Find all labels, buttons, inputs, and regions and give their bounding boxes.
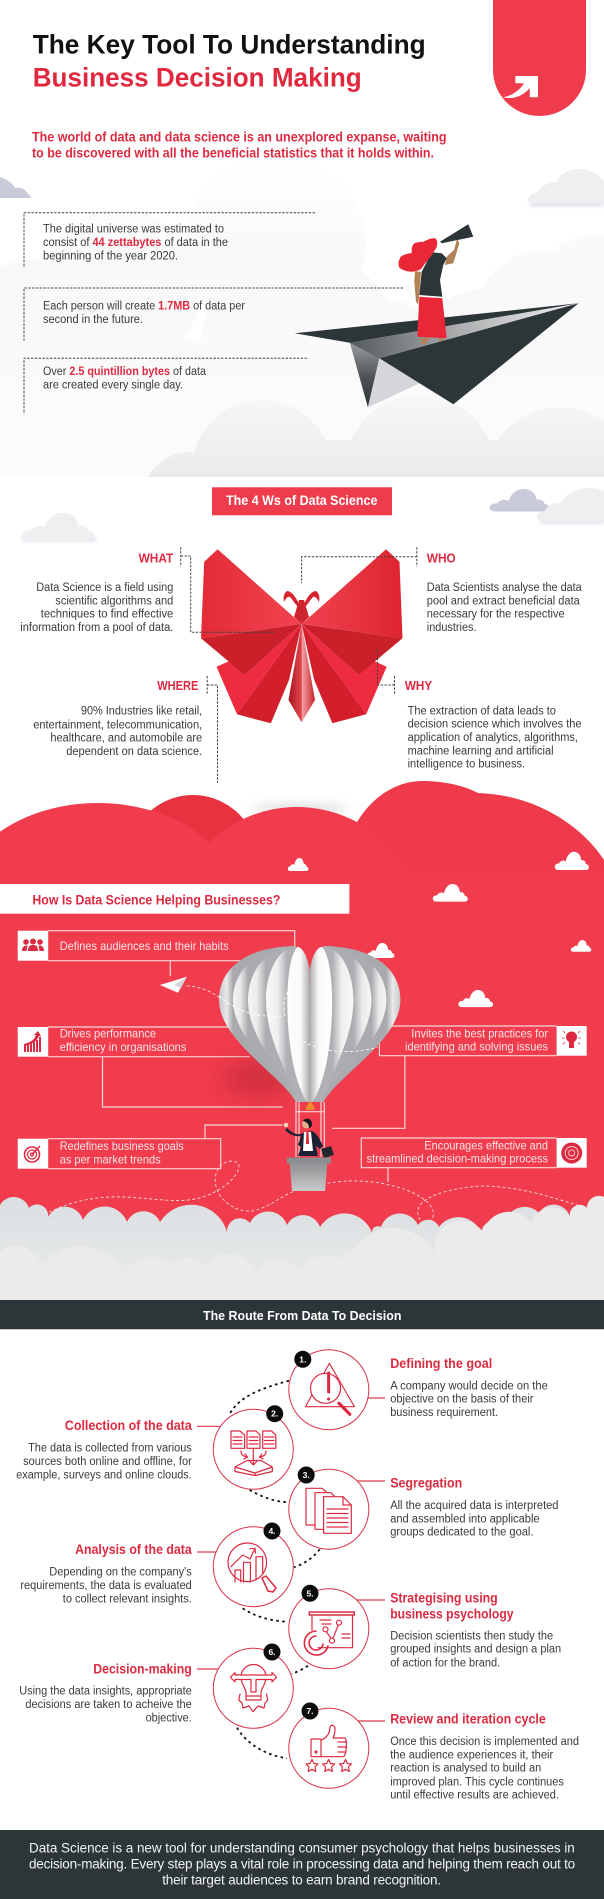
step 7: review and iteration: 7. bbox=[306, 1706, 314, 1716]
illustration: heart balloon bbox=[219, 946, 400, 1102]
icon: small white clouds bbox=[288, 852, 591, 1007]
block: WHO: pool and extract beneficial data bbox=[427, 595, 580, 607]
card: drives performance: efficiency in organisations bbox=[60, 1040, 186, 1054]
step 6: decision-making: Using the data insights, appropriate bbox=[19, 1686, 192, 1698]
icon: documents into box bbox=[231, 1431, 276, 1476]
block: WHY bbox=[378, 648, 582, 771]
block: WHERE: healthcare, and automobile are bbox=[50, 733, 202, 745]
step 5: strategising bbox=[289, 1585, 561, 1669]
illustration: balloon shadow bbox=[224, 1060, 292, 1096]
step 2: collection of the data: example, surveys and online clouds. bbox=[16, 1470, 192, 1482]
step 5: strategising: Strategising using bbox=[390, 1591, 498, 1606]
heading: How Is Data Science Helping Businesses? bbox=[0, 884, 349, 914]
illustration: paper plane small bbox=[160, 977, 220, 998]
step 7: review and iteration: reaction is analysed to build an bbox=[390, 1763, 541, 1775]
card: defines audiences bbox=[18, 931, 229, 961]
step 7: review and iteration: the audience experiences it, their bbox=[390, 1749, 553, 1761]
card: defines audiences: Defines audiences and their habits bbox=[60, 939, 229, 953]
dotted connectors between steps bbox=[230, 1381, 320, 1758]
block: WHO: necessary for the respective bbox=[427, 609, 565, 621]
card: invites best practices: Invites the best practices for bbox=[411, 1026, 548, 1040]
stat: 1.7MB bbox=[24, 288, 403, 342]
step 4: analysis of the data: to collect relevant insights. bbox=[63, 1593, 192, 1605]
step 4: analysis of the data: Depending on the company's bbox=[49, 1567, 192, 1579]
block: WHY: WHY bbox=[405, 678, 432, 693]
icon: growth chart bbox=[24, 1031, 41, 1052]
section heading: The 4 Ws of Data Science bbox=[212, 487, 392, 515]
title: The Key Tool To Understanding bbox=[33, 29, 426, 59]
subtitle: to be discovered with all the beneficial statistics that it holds within. bbox=[32, 146, 434, 161]
block: WHAT: information from a pool of data. bbox=[20, 622, 173, 634]
icon: chart magnifier bbox=[228, 1543, 276, 1592]
step 5: strategising: business psychology bbox=[390, 1606, 514, 1621]
illustration: origami butterfly bbox=[201, 549, 402, 723]
card: invites best practices: identifying and solving issues bbox=[405, 1040, 548, 1054]
step 2: collection of the data: 2. bbox=[271, 1409, 278, 1419]
stat: 1.7MB: second in the future. bbox=[43, 314, 143, 326]
step 2: collection of the data: sources both online and offline, for bbox=[23, 1456, 192, 1468]
panel: red sky with cloud top bbox=[0, 781, 604, 1270]
logo: red shield with arrow bbox=[493, 0, 586, 116]
step 2: collection of the data: Collection of the data bbox=[65, 1418, 192, 1433]
step 3: segregation: groups dedicated to the goal. bbox=[390, 1527, 534, 1539]
step 3: segregation: All the acquired data is interpreted bbox=[390, 1500, 558, 1512]
step 7: review and iteration: Review and iteration cycle bbox=[390, 1712, 546, 1727]
block: WHERE bbox=[33, 676, 218, 783]
card: drives performance bbox=[18, 1027, 186, 1057]
card: encourages decision-making: streamlined decision-making process bbox=[367, 1152, 548, 1166]
step 1: defining the goal: A company would decide on the bbox=[390, 1380, 548, 1392]
step 4: analysis of the data: Analysis of the data bbox=[75, 1542, 192, 1557]
icon: people bbox=[22, 938, 44, 951]
step 1: defining the goal: objective on the basis of their bbox=[390, 1394, 534, 1406]
step 3: segregation: 3. bbox=[303, 1470, 310, 1480]
block: WHAT: Data Science is a field using bbox=[36, 582, 173, 594]
step 6: decision-making: Decision-making bbox=[93, 1661, 192, 1676]
illustration: businessman bbox=[284, 1119, 334, 1158]
dashed flight path bbox=[44, 1161, 590, 1225]
icon: presentation board bbox=[304, 1612, 354, 1655]
step 4: analysis of the data: requirements, the data is evaluated bbox=[20, 1580, 192, 1592]
block: WHAT: techniques to find effective bbox=[41, 609, 173, 621]
footer: conclusion: Data Science is a new tool for understanding consumer psychology that helps businesses in bbox=[29, 1841, 575, 1856]
block: WHY: The extraction of data leads to bbox=[408, 705, 556, 717]
card: invites best practices bbox=[405, 1026, 587, 1056]
icon: cloud left bbox=[22, 513, 96, 541]
block: WHO: industries. bbox=[427, 622, 476, 634]
step 6: decision-making bbox=[19, 1644, 293, 1728]
step 7: review and iteration: improved plan. This cycle continues bbox=[390, 1776, 564, 1788]
block: WHERE: dependent on data science. bbox=[66, 746, 202, 758]
section heading: The 4 Ws of Data Science: The 4 Ws of Data Science bbox=[226, 493, 378, 508]
step 6: decision-making: objective. bbox=[146, 1712, 192, 1724]
illustration: woman with megaphone bbox=[398, 224, 473, 344]
stat: 44 zettabytes: beginning of the year 2020. bbox=[43, 250, 178, 262]
step 7: review and iteration bbox=[289, 1702, 579, 1802]
step 5: strategising: grouped insights and design a plan bbox=[390, 1644, 561, 1656]
illustration: paper plane bbox=[295, 303, 579, 407]
block: WHAT: WHAT bbox=[139, 550, 173, 565]
block: WHO: WHO bbox=[427, 550, 456, 565]
panel: intro section background clouds bbox=[148, 396, 604, 477]
section heading: The Route From Data To Decision: The Route From Data To Decision bbox=[203, 1308, 401, 1323]
block: WHY: decision science which involves the bbox=[408, 719, 582, 731]
title: Business Decision Making bbox=[33, 63, 362, 93]
card: encourages decision-making: Encourages effective and bbox=[424, 1138, 548, 1152]
step 5: strategising: 5. bbox=[306, 1588, 314, 1598]
step 6: decision-making: 6. bbox=[268, 1647, 276, 1657]
block: WHERE: 90% Industries like retail, bbox=[81, 705, 202, 717]
stat: 44 zettabytes: The digital universe was estimated to bbox=[43, 223, 224, 235]
icon: clouds right bbox=[489, 488, 604, 523]
block: WHY: intelligence to business. bbox=[408, 759, 525, 771]
stat: 2.5 quintillion bytes bbox=[24, 358, 307, 414]
illustration: balloon basket bbox=[287, 1158, 331, 1191]
stat: 44 zettabytes: consist of 44 zettabytes of data in the bbox=[43, 237, 228, 249]
subtitle bbox=[32, 130, 446, 161]
step 7: review and iteration: Once this decision is implemented and bbox=[390, 1736, 579, 1748]
step 3: segregation: and assembled into applicable bbox=[390, 1513, 540, 1525]
step 5: strategising: of action for the brand. bbox=[390, 1657, 500, 1669]
subtitle: The world of data and data science is an unexplored expanse, waiting bbox=[32, 130, 446, 145]
step 5: strategising: Decision scientists then study the bbox=[390, 1630, 553, 1642]
block: WHY: machine learning and artificial bbox=[408, 745, 554, 757]
step 1: defining the goal: 1. bbox=[299, 1354, 306, 1364]
block: WHERE: entertainment, telecommunication, bbox=[33, 719, 202, 731]
step 4: analysis of the data bbox=[20, 1522, 293, 1607]
connectors behind balloon bbox=[48, 931, 557, 1182]
icon: light bulb bbox=[562, 1031, 581, 1048]
icon: stacked documents bbox=[306, 1488, 351, 1533]
section heading: The Route From Data To Decision bbox=[0, 1300, 604, 1329]
step 3: segregation bbox=[289, 1466, 558, 1549]
step 7: review and iteration: until effective results are achieved. bbox=[390, 1790, 559, 1802]
stat: 2.5 quintillion bytes: Over 2.5 quintillion bytes of data bbox=[43, 366, 207, 378]
illustration: balloon ropes and flame bbox=[296, 1101, 324, 1157]
stat: 44 zettabytes bbox=[24, 213, 315, 268]
step 6: decision-making: decisions are taken to acheive the bbox=[25, 1699, 192, 1711]
step 1: defining the goal: Defining the goal bbox=[390, 1356, 492, 1371]
card: encourages decision-making bbox=[367, 1138, 587, 1168]
icon: top right cloud bbox=[528, 169, 604, 206]
icon: bulb gear with arrows bbox=[230, 1664, 277, 1712]
block: WHAT bbox=[20, 547, 275, 634]
block: WHERE: WHERE bbox=[157, 678, 199, 693]
card: drives performance: Drives performance bbox=[60, 1027, 156, 1041]
title bbox=[33, 29, 426, 93]
icon: target bbox=[24, 1146, 40, 1162]
card: redefines goals: Redefines business goals bbox=[60, 1139, 184, 1153]
footer: conclusion: decision-making. Every step plays a vital role in processing data and helping them reach out to bbox=[29, 1857, 575, 1872]
heading: How Is Data Science Helping Businesses?: How Is Data Science Helping Businesses? bbox=[32, 892, 280, 907]
stat: 2.5 quintillion bytes: are created every single day. bbox=[43, 380, 183, 392]
icon: maze bbox=[561, 1142, 582, 1164]
step 2: collection of the data bbox=[16, 1405, 293, 1489]
block: WHO bbox=[302, 547, 582, 634]
block: WHY: application of analytics, algorithms, bbox=[408, 732, 578, 744]
card: redefines goals: as per market trends bbox=[60, 1152, 161, 1166]
step 1: defining the goal: business requirement. bbox=[390, 1407, 498, 1419]
step 2: collection of the data: The data is collected from various bbox=[28, 1443, 192, 1455]
block: WHO: Data Scientists analyse the data bbox=[427, 582, 582, 594]
card: redefines goals bbox=[18, 1139, 184, 1169]
icon: top left cloud bbox=[0, 177, 31, 198]
footer: conclusion: their target audiences to earn brand recognition. bbox=[162, 1872, 441, 1887]
icon: warning magnifier bbox=[306, 1363, 354, 1414]
step 4: analysis of the data: 4. bbox=[268, 1526, 276, 1536]
footer: conclusion bbox=[0, 1830, 604, 1899]
clouds: bottom of balloon scene bbox=[0, 1196, 604, 1300]
stat: 1.7MB: Each person will create 1.7MB of data per bbox=[43, 300, 245, 312]
icon: thumbs up and stars bbox=[306, 1725, 352, 1772]
step 3: segregation: Segregation bbox=[390, 1476, 462, 1491]
block: WHAT: scientific algorithms and bbox=[55, 595, 173, 607]
step 1: defining the goal bbox=[289, 1350, 548, 1430]
